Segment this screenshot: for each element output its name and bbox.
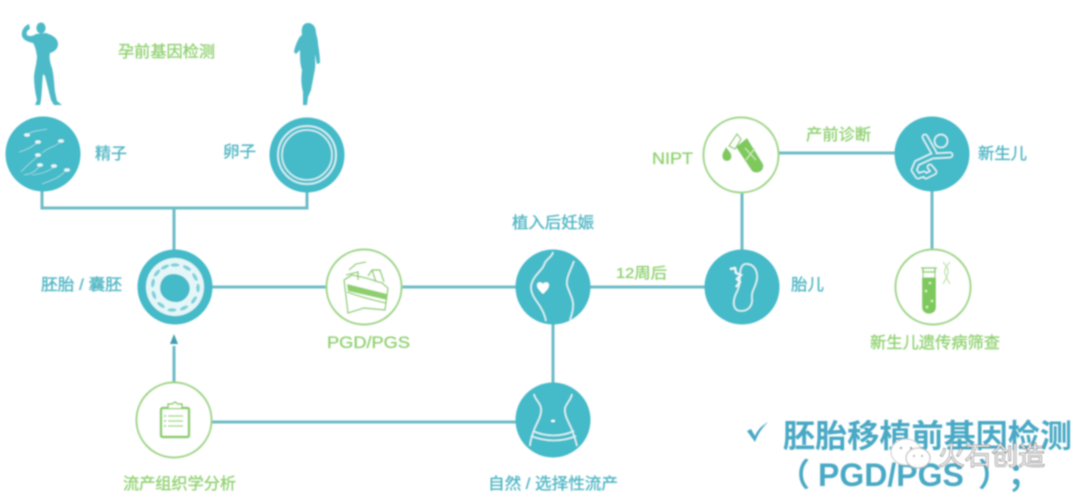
label: newborn: 新生儿 <box>978 145 1027 163</box>
icon: NIPT test tube <box>704 118 778 192</box>
icon: abdomen <box>516 382 590 458</box>
icon: fetus <box>704 250 780 324</box>
label: natural / elective abortion: 自然 / 选择性流产 <box>488 475 618 493</box>
label: PGD/PGS: PGD/PGS <box>327 333 410 352</box>
label: after 12 weeks: 12周后 <box>616 265 667 282</box>
watermark: chat bubbles icon <box>891 439 930 468</box>
icon: embryo / blastocyst <box>138 250 212 324</box>
headline: PGD line two: ） <box>978 457 1010 493</box>
icon: female figure <box>294 23 320 105</box>
connector lines <box>42 153 932 422</box>
label: post-implantation pregnancy: 植入后妊娠 <box>512 214 594 232</box>
icon: check mark <box>747 422 768 442</box>
label: prenatal diagnosis: 产前诊断 <box>806 126 871 144</box>
icon: clipboard <box>136 382 212 458</box>
label: newborn genetic disease screening: 新生儿遗传病筛查 <box>870 333 1000 352</box>
label: embryo / blastocyst: 胚胎 / 囊胚 <box>41 276 122 294</box>
icon: pregnant belly <box>516 250 590 324</box>
label: sperm: 精子 <box>95 145 127 163</box>
label: egg: 卵子 <box>223 143 256 161</box>
arrow head <box>170 334 178 344</box>
icon: sperm <box>6 116 80 192</box>
headline: PGD line two: PGD/PGS <box>818 457 964 493</box>
label: NIPT: NIPT <box>652 149 693 168</box>
headline: PGD line one: 胚胎移植前基因检测 <box>783 418 1072 454</box>
icon: newborn screening tube <box>896 250 970 324</box>
headline: PGD line two: ； <box>1008 457 1040 493</box>
icon: male figure <box>22 22 62 105</box>
label: miscarriage tissue analysis: 流产组织学分析 <box>123 475 236 493</box>
icon: egg <box>270 118 344 192</box>
icon: PGD/PGS lab box <box>326 250 402 324</box>
watermark: text: 火石创造 <box>938 441 1045 471</box>
headline: PGD line two: （ <box>778 457 810 493</box>
heading: pre-pregnancy genetic testing: 孕前基因检测 <box>118 43 215 61</box>
label: fetus: 胎儿 <box>791 276 824 294</box>
icon: newborn baby <box>894 116 970 192</box>
